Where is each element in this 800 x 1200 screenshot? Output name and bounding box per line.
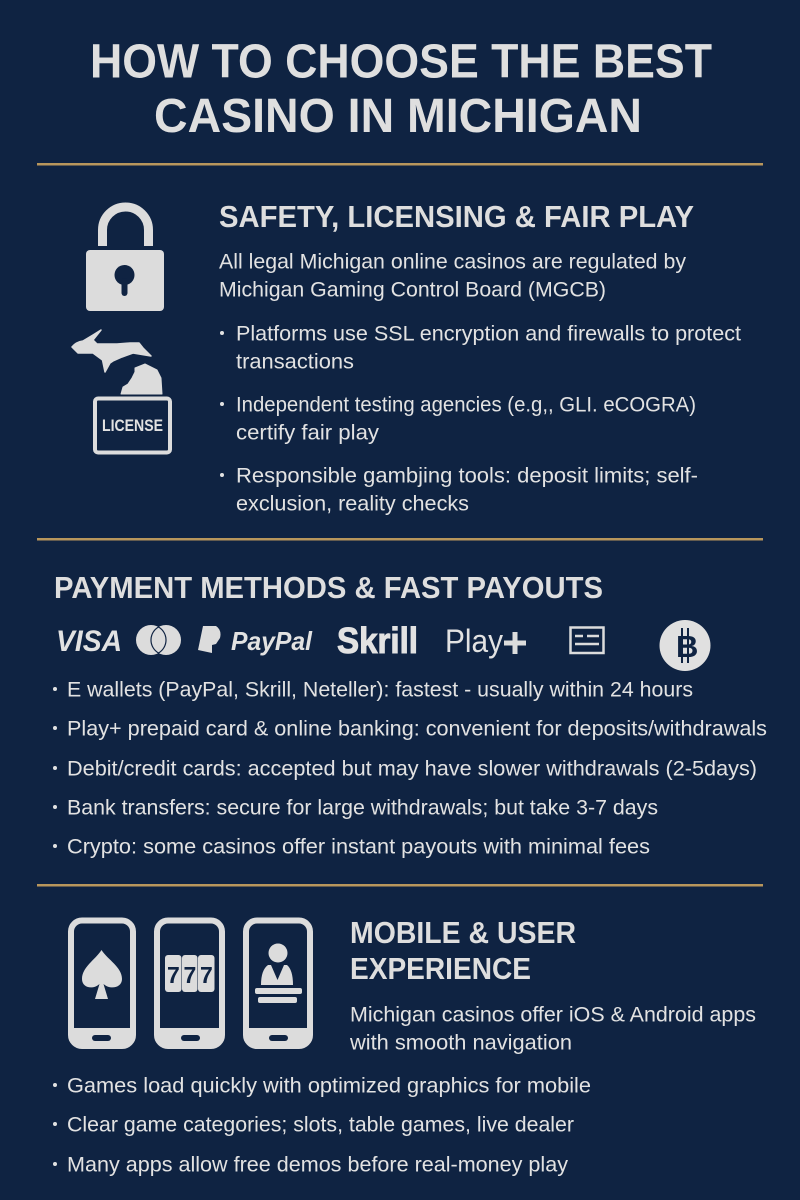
list: safety bullets	[220, 322, 741, 516]
icon: phone with spade	[71, 920, 133, 1046]
text block: safety intro: Michigan Gaming Control Board (MGCB)	[219, 278, 606, 302]
icon: Visa: VISA	[56, 625, 122, 658]
text block: mobile intro: with smooth navigation	[349, 1032, 572, 1054]
list: safety bullets: Independent testing agencies (e.g,, GLI. eCOGRA)	[236, 394, 696, 416]
heading: mobile: EXPERIENCE	[350, 952, 531, 986]
icon: Michigan map	[72, 330, 162, 394]
list: payment bullets: E wallets (PayPal, Skrill, Neteller): fastest - usually within 24 hours	[67, 678, 693, 702]
list: safety bullets: Platforms use SSL encryption and firewalls to protect	[236, 322, 741, 346]
icon: phone with live dealer	[246, 920, 310, 1046]
list: safety bullets: exclusion, reality checks	[236, 492, 469, 516]
list: payment bullets: Play+ prepaid card & online banking: convenient for deposits/withdrawals	[67, 718, 767, 740]
icon: Bitcoin	[660, 620, 710, 671]
list: mobile bullets: Clear game categories; slots, table games, live dealer	[67, 1114, 574, 1136]
icon: PayPal mark	[198, 626, 220, 653]
heading: mobile	[350, 916, 576, 986]
icon: license badge: LICENSE	[102, 416, 163, 435]
title: HOW TO CHOOSE THE BEST	[90, 36, 712, 88]
icon: phone with slot reels: 7	[200, 962, 213, 988]
list: mobile bullets	[53, 1074, 591, 1176]
list: payment bullets	[53, 678, 767, 858]
list: payment bullets: Crypto: some casinos offer instant payouts with minimal fees	[67, 836, 650, 858]
icon: license badge	[95, 398, 170, 452]
list: safety bullets: certify fair play	[236, 422, 380, 444]
list: mobile bullets: Many apps allow free demos before real-money play	[67, 1154, 569, 1176]
text block: safety intro	[219, 250, 686, 302]
list: payment bullets: Bank transfers: secure for large withdrawals; but take 3-7 days	[67, 796, 658, 820]
icon: Bitcoin: B	[676, 629, 698, 664]
icon row: payment logos	[56, 620, 710, 671]
heading: safety: SAFETY, LICENSING & FAIR PLAY	[219, 200, 694, 234]
icon: Skrill: Skrill	[337, 620, 418, 661]
icon: padlock	[86, 207, 164, 311]
list: safety bullets: Responsible gambjing tools: deposit limits; self-	[236, 464, 698, 488]
icon: Mastercard	[136, 625, 181, 655]
icon: bank card	[570, 628, 604, 653]
heading: mobile: MOBILE & USER	[350, 916, 576, 950]
text block: mobile intro: Michigan casinos offer iOS & Android apps	[350, 1004, 756, 1026]
title: CASINO IN MICHIGAN	[154, 90, 642, 143]
title	[90, 36, 712, 143]
list: mobile bullets: Games load quickly with optimized graphics for mobile	[67, 1074, 591, 1098]
text block: safety intro: All legal Michigan online casinos are regulated by	[219, 250, 686, 274]
heading: payments: PAYMENT METHODS & FAST PAYOUTS	[54, 571, 603, 605]
icon: PayPal word: PayPal	[231, 626, 313, 656]
icon: phone with slot reels	[157, 920, 222, 1046]
icon: Play+: Play	[445, 623, 503, 659]
list: safety bullets: transactions	[236, 350, 354, 374]
icon: phone with slot reels: 7	[184, 962, 196, 988]
text block: mobile intro	[349, 1004, 756, 1054]
icon: phone with slot reels: 7	[167, 962, 180, 988]
list: payment bullets: Debit/credit cards: accepted but may have slower withdrawals (2-5days)	[67, 758, 757, 780]
